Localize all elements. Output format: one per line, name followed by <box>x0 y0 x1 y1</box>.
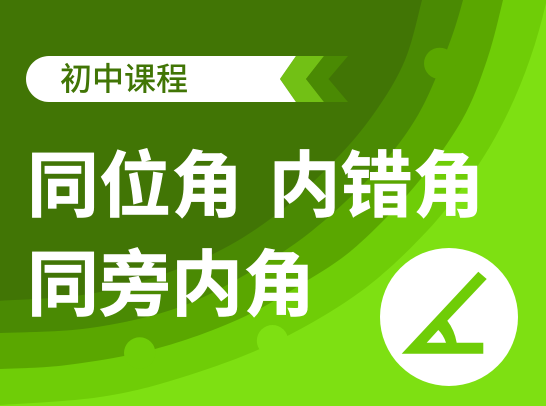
title: line one left: 同位角 <box>27 147 243 227</box>
chevron: dark green <box>306 56 348 102</box>
icon: angle in white circle <box>380 248 518 386</box>
tag text: 初中课程 <box>60 61 188 97</box>
title: line one right: 内错角 <box>268 147 485 227</box>
tag: course label pill <box>26 56 348 102</box>
title: line two: 同旁内角 <box>27 246 315 326</box>
chevron: light green <box>280 56 324 102</box>
